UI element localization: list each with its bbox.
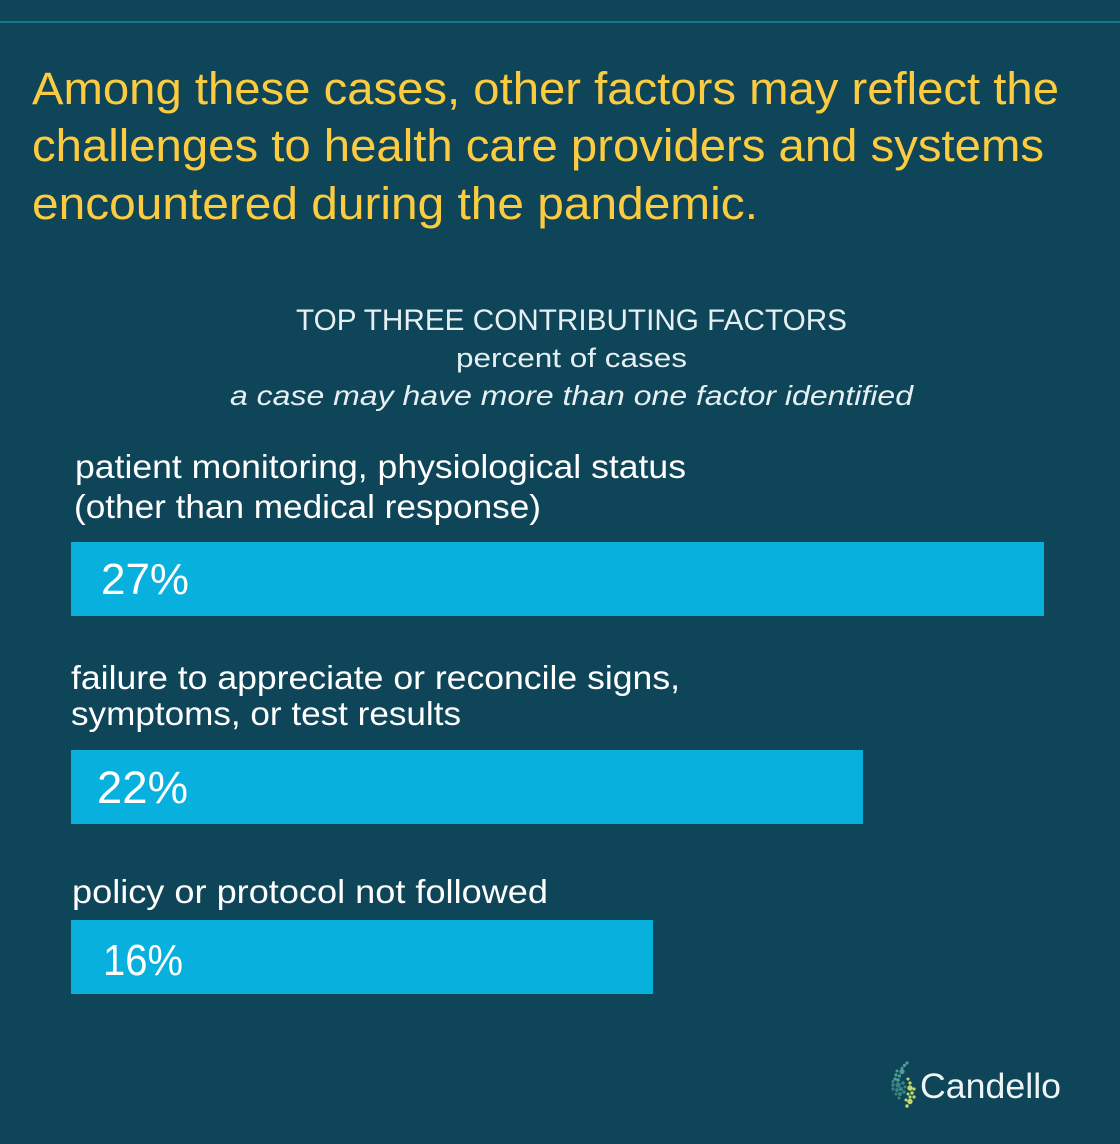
factor 2: failure to appreciate	[71, 659, 863, 824]
chart heading: TOP THREE CONTRIBUTING FACTORS	[296, 304, 847, 337]
factor 1: patient monitoring	[71, 448, 1044, 616]
label: patient monitoring	[74, 448, 686, 525]
title: Among these cases, other factors may reflect the	[32, 63, 1059, 114]
title: challenges to health care providers and systems	[32, 120, 1044, 171]
factor 3: policy not followed	[71, 873, 653, 994]
logo: Candello	[891, 1061, 1061, 1108]
bar: 16%	[71, 920, 653, 994]
label: patient monitoring: (other than medical response)	[74, 488, 541, 525]
bar: 22%	[71, 750, 863, 824]
chart heading: a case may have more than one factor identified	[230, 380, 915, 411]
value: 16%: 16%	[103, 936, 183, 985]
bar chart	[71, 448, 1044, 994]
value: 22%: 22%	[97, 762, 188, 813]
label: failure to appreciate	[71, 659, 680, 732]
label: patient monitoring: patient monitoring, physiological status	[75, 448, 686, 485]
chart heading	[230, 304, 915, 411]
bar: 27%	[71, 542, 1044, 616]
wordmark: Candello	[920, 1067, 1061, 1106]
value: 27%: 27%	[101, 555, 189, 604]
icon: dotted flame	[891, 1061, 916, 1108]
label: failure to appreciate: failure to appreciate or reconcile signs,	[71, 659, 680, 696]
title: encountered during the pandemic.	[32, 178, 758, 229]
title	[32, 63, 1059, 229]
label: policy or protocol: policy or protocol not followed	[72, 873, 548, 910]
chart heading: percent of cases	[456, 343, 687, 373]
label: failure to appreciate: symptoms, or test results	[71, 695, 461, 732]
